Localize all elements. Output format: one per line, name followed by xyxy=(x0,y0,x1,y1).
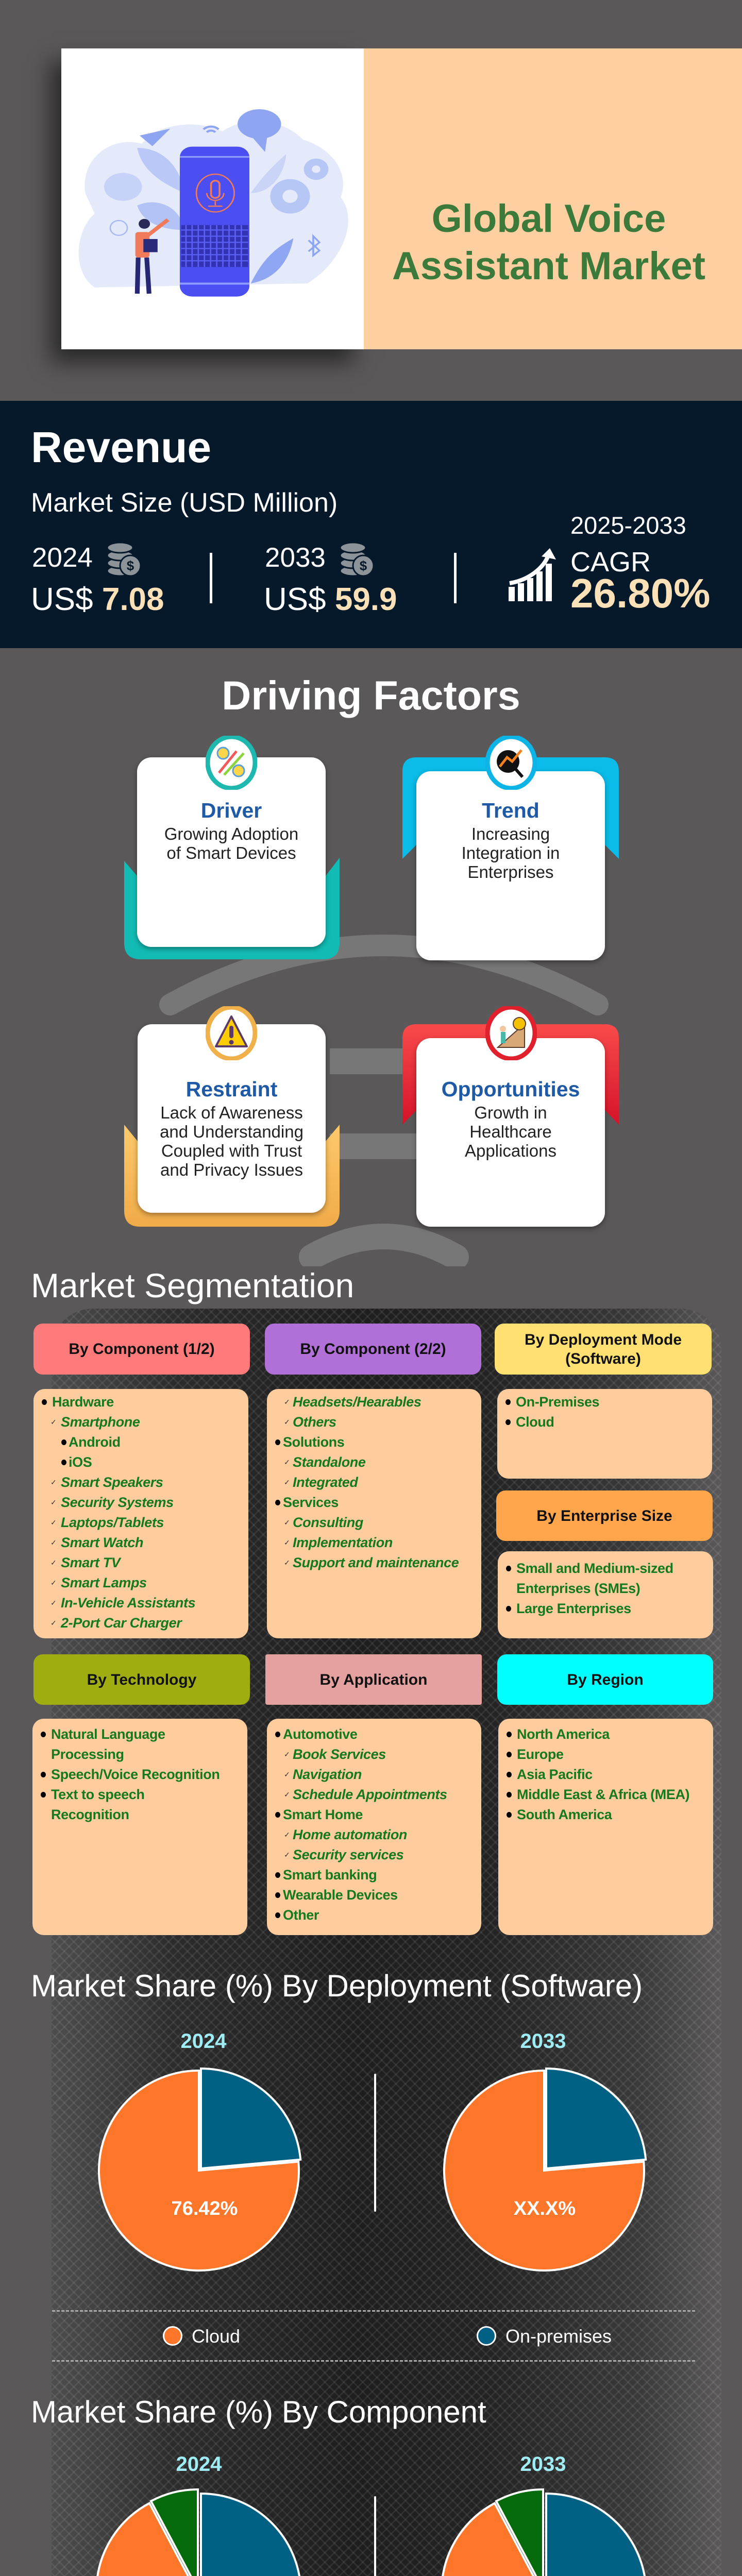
segmentation list: component 1/2: Smart Speakers xyxy=(61,1475,163,1490)
segmentation list: component 1/2: In-Vehicle Assistants xyxy=(61,1595,195,1611)
decorative wifi arcs xyxy=(159,935,609,1266)
text: Growth in xyxy=(474,1103,547,1122)
subheading: Market Size (USD Million) xyxy=(31,488,338,518)
heading: market share by component: Market Share (%) By Component xyxy=(31,2395,486,2429)
segmentation list: application: Smart banking xyxy=(283,1867,377,1883)
segmentation list: deployment: On-Premises xyxy=(516,1394,599,1410)
divider xyxy=(454,553,457,603)
text: Healthcare xyxy=(469,1122,552,1141)
segmentation header: component 2/2: By Component (2/2) xyxy=(300,1341,446,1358)
title: Trend: Trend xyxy=(482,799,539,822)
icon: opportunity xyxy=(485,1006,537,1060)
segmentation list: component 1/2: 2-Port Car Charger xyxy=(61,1615,181,1631)
revenue panel xyxy=(0,401,742,648)
legend: deployment: On-premises xyxy=(505,2326,612,2347)
segmentation list: deployment: Cloud xyxy=(516,1414,554,1430)
icon: trend xyxy=(485,736,537,790)
text: and Privacy Issues xyxy=(160,1160,303,1179)
title: Restraint: Restraint xyxy=(186,1077,277,1101)
segmentation header: enterprise size xyxy=(496,1490,713,1541)
panel: trend xyxy=(402,736,619,964)
year label 2033: 2033 xyxy=(520,2453,566,2476)
text xyxy=(465,1103,556,1160)
segmentation list: component 2/2: Support and maintenance xyxy=(293,1555,459,1570)
segmentation list: application xyxy=(267,1719,481,1935)
segmentation list: component 1/2: Security Systems xyxy=(61,1495,174,1510)
year label 2024: 2024 xyxy=(176,2453,222,2476)
segmentation header: application: By Application xyxy=(320,1671,427,1688)
segmentation list: enterprise size: Enterprises (SMEs) xyxy=(516,1581,640,1596)
segmentation header: component 1/2: By Component (1/2) xyxy=(69,1341,215,1358)
text: Increasing xyxy=(471,824,550,843)
segmentation list: component 2/2: Solutions xyxy=(283,1434,344,1450)
segmentation list: region: South America xyxy=(517,1807,612,1822)
illustration: voice assistant xyxy=(78,109,348,297)
segmentation list: application: Automotive xyxy=(283,1726,358,1742)
text xyxy=(160,1103,303,1179)
segmentation list: component 1/2: Smart Lamps xyxy=(61,1575,147,1590)
segmentation list: application: Book Services xyxy=(293,1747,386,1762)
title: Global Voice xyxy=(432,197,666,241)
title xyxy=(392,197,705,288)
segmentation list: component 1/2: Laptops/Tablets xyxy=(61,1515,164,1530)
heading: Driving Factors: Driving Factors xyxy=(222,672,520,718)
segmentation header: deployment xyxy=(495,1324,712,1375)
panel: driver xyxy=(124,736,340,959)
text: Lack of Awareness xyxy=(160,1103,303,1122)
stat 2024 xyxy=(31,543,164,617)
year label 2033: 2033 xyxy=(520,2030,566,2053)
header background shadow box xyxy=(61,48,364,349)
segmentation header: enterprise size: By Enterprise Size xyxy=(536,1507,672,1524)
segmentation header: application xyxy=(265,1654,482,1705)
speaker background texture xyxy=(52,1309,721,2576)
segmentation list: application: Wearable Devices xyxy=(283,1887,398,1903)
legend: deployment: Cloud xyxy=(192,2326,240,2347)
segmentation list: application: Schedule Appointments xyxy=(293,1787,447,1802)
segmentation list: technology: Natural Language xyxy=(51,1726,165,1742)
segmentation list: component 1/2: Smartphone xyxy=(61,1414,140,1430)
segmentation list: component 1/2: Smart TV xyxy=(61,1555,120,1570)
panel: restraint xyxy=(124,1006,340,1227)
icon: driver xyxy=(206,736,257,790)
segmentation list: component 2/2: Headsets/Hearables xyxy=(293,1394,421,1410)
text xyxy=(164,824,298,862)
segmentation header: region: By Region xyxy=(567,1671,644,1688)
segmentation list: technology: Text to speech xyxy=(51,1787,144,1802)
segmentation list: application: Security services xyxy=(293,1847,403,1862)
segmentation list: technology: Recognition xyxy=(51,1807,129,1822)
segmentation list: component 1/2: Hardware xyxy=(52,1394,114,1410)
header title panel xyxy=(364,48,742,349)
CAGR stat xyxy=(570,512,710,616)
segmentation list: application: Other xyxy=(283,1907,319,1923)
stat 2024: US$ 7.08 xyxy=(31,582,164,617)
icon: warning xyxy=(206,1006,257,1060)
text: Coupled with Trust xyxy=(161,1141,302,1160)
segmentation header: technology: By Technology xyxy=(87,1671,196,1688)
text: of Smart Devices xyxy=(166,843,296,862)
segmentation list: enterprise size: Large Enterprises xyxy=(516,1601,631,1616)
icon: coins: $ xyxy=(127,558,134,573)
segmentation header: deployment: (Software) xyxy=(565,1350,641,1367)
text: Growing Adoption xyxy=(164,824,298,843)
segmentation list: application: Smart Home xyxy=(283,1807,363,1822)
segmentation list: region: Middle East & Africa (MEA) xyxy=(517,1787,689,1802)
segmentation list: enterprise size xyxy=(498,1551,713,1638)
pie label 2024: 76.42% xyxy=(172,2198,238,2219)
icon: coins xyxy=(341,543,373,575)
segmentation list: component 2/2 xyxy=(267,1389,481,1638)
segmentation list: region: North America xyxy=(517,1726,610,1742)
pie label 2033: XX.X% xyxy=(514,2198,576,2219)
segmentation header: component 1/2 xyxy=(33,1324,250,1375)
icon: growth arrow xyxy=(509,548,556,601)
segmentation list: region xyxy=(498,1719,713,1935)
stat 2033: 2033 xyxy=(265,543,326,573)
segmentation list: application: Home automation xyxy=(293,1827,407,1842)
segmentation list: technology: Speech/Voice Recognition xyxy=(51,1767,220,1782)
panel: opportunities xyxy=(402,1006,619,1230)
segmentation list: component 2/2: Consulting xyxy=(293,1515,363,1530)
segmentation header: component 2/2 xyxy=(265,1324,481,1375)
segmentation list: region: Europe xyxy=(517,1747,564,1762)
segmentation list: technology: Processing xyxy=(51,1747,124,1762)
CAGR stat: 2025-2033 xyxy=(570,512,686,539)
segmentation list: technology xyxy=(32,1719,247,1935)
segmentation list: component 2/2: Integrated xyxy=(293,1475,358,1490)
stat 2033 xyxy=(264,543,397,617)
pie chart: deployment xyxy=(98,2067,647,2272)
text xyxy=(462,824,560,882)
segmentation list: enterprise size: Small and Medium-sized xyxy=(516,1561,673,1576)
year label 2024: 2024 xyxy=(181,2030,226,2053)
segmentation list: component 1/2: iOS xyxy=(69,1454,92,1470)
segmentation list: component 2/2: Services xyxy=(283,1495,339,1510)
pie chart: component xyxy=(96,2488,646,2576)
segmentation list: component 1/2: Android xyxy=(69,1434,121,1450)
heading: Market Segmentation: Market Segmentation xyxy=(31,1266,354,1304)
segmentation list: deployment xyxy=(497,1389,712,1479)
segmentation list: component 2/2: Implementation xyxy=(293,1535,393,1550)
icon: coins: $ xyxy=(360,558,367,573)
segmentation list: region: Asia Pacific xyxy=(517,1767,593,1782)
text: Integration in xyxy=(462,843,560,862)
segmentation list: component 2/2: Standalone xyxy=(293,1454,366,1470)
divider xyxy=(210,553,212,603)
stat 2024: 2024 xyxy=(32,543,93,573)
title: Assistant Market xyxy=(392,244,705,288)
segmentation header: technology xyxy=(33,1654,250,1705)
text: and Understanding xyxy=(160,1122,303,1141)
segmentation list: component 1/2: Smart Watch xyxy=(61,1535,143,1550)
segmentation list: component 2/2: Others xyxy=(293,1414,336,1430)
title: Opportunities: Opportunities xyxy=(442,1077,580,1101)
CAGR stat: CAGR xyxy=(570,547,651,578)
text: Applications xyxy=(465,1141,556,1160)
segmentation list: application: Navigation xyxy=(293,1767,362,1782)
icon: coins xyxy=(108,543,140,575)
text: Enterprises xyxy=(468,862,553,882)
CAGR stat: 26.80% xyxy=(570,570,710,616)
title: Driver: Driver xyxy=(201,799,262,822)
segmentation header: deployment: By Deployment Mode xyxy=(525,1331,682,1348)
segmentation header: region xyxy=(497,1654,713,1705)
stat 2033: US$ 59.9 xyxy=(264,582,397,617)
heading: Revenue: Revenue xyxy=(31,423,211,471)
legend: deployment xyxy=(52,2310,695,2362)
heading: market share by deployment: Market Share (%) By Deployment (Software) xyxy=(31,1969,643,2003)
segmentation list: component 1/2 xyxy=(33,1389,248,1638)
